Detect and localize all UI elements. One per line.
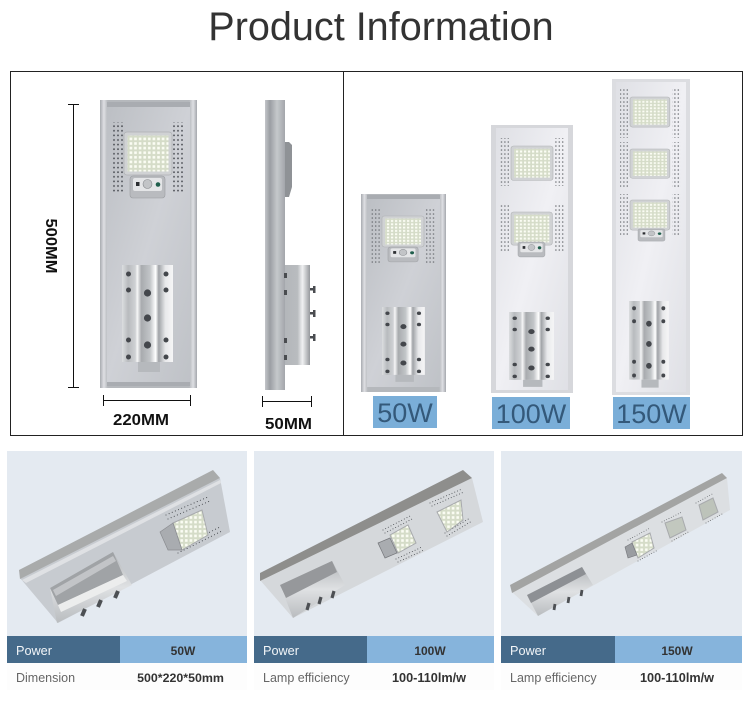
panel: 50W product card: Dimension xyxy=(16,671,75,685)
panel: 150W product card xyxy=(501,451,742,690)
product photo background xyxy=(501,451,742,636)
mounting bracket xyxy=(122,265,173,372)
dimension: 500MM xyxy=(42,104,79,388)
vent holes xyxy=(112,122,185,192)
side module bump xyxy=(285,142,292,197)
panel: 100W product card: 100W xyxy=(414,644,446,658)
label: 150W: 150W xyxy=(616,399,687,429)
lamp body front xyxy=(100,100,197,388)
panel: 150W product card: Power xyxy=(510,644,547,658)
dimension: 220MM xyxy=(104,395,190,429)
panel: 150W product card: 150W xyxy=(661,644,693,658)
panel: 50W product card: 50W xyxy=(171,644,196,658)
spec header row xyxy=(501,636,615,663)
title: Product Information xyxy=(208,5,554,49)
dimension: 220MM: 220MM xyxy=(113,412,169,429)
panel: 100W product card: 100-110lm/w xyxy=(392,671,466,685)
product photo background xyxy=(7,451,247,636)
spec detail row xyxy=(254,663,494,690)
panel: 50W product card: 500*220*50mm xyxy=(137,671,224,685)
panel: dimensions and wattage frame xyxy=(10,71,742,436)
lamp 150W xyxy=(612,79,690,395)
angled lamp 50W xyxy=(19,470,230,623)
angled lamp 100W xyxy=(260,470,483,618)
side body xyxy=(265,100,285,390)
dimension: 500MM: 500MM xyxy=(42,218,59,274)
dimension: 50MM xyxy=(262,396,312,433)
LED module xyxy=(124,132,172,175)
product photo background xyxy=(254,451,494,636)
panel: 100W product card: Power xyxy=(263,644,300,658)
panel: 100W product card xyxy=(254,451,494,690)
label: 100W: 100W xyxy=(496,399,567,429)
spec header row xyxy=(7,636,120,663)
side pole clamp xyxy=(285,265,310,365)
sensor xyxy=(130,176,165,198)
panel: 50W product card: Power xyxy=(16,644,53,658)
lamp 50W xyxy=(361,194,446,392)
spec detail row xyxy=(7,663,247,690)
angled lamp 150W xyxy=(510,473,730,616)
lamp front view with dimensions xyxy=(100,100,197,388)
spec header row xyxy=(254,636,367,663)
dimension: 50MM: 50MM xyxy=(265,416,312,433)
spec detail row xyxy=(501,663,742,690)
side bolts xyxy=(284,273,316,360)
lamp 100W xyxy=(491,125,573,393)
lamp side view xyxy=(265,100,316,390)
panel: 100W product card: Lamp efficiency xyxy=(263,671,350,685)
panel: 150W product card: Lamp efficiency xyxy=(510,671,597,685)
panel: 150W product card: 100-110lm/w xyxy=(640,671,714,685)
label: 50W: 50W xyxy=(377,398,433,428)
panel: 50W product card xyxy=(7,451,247,690)
